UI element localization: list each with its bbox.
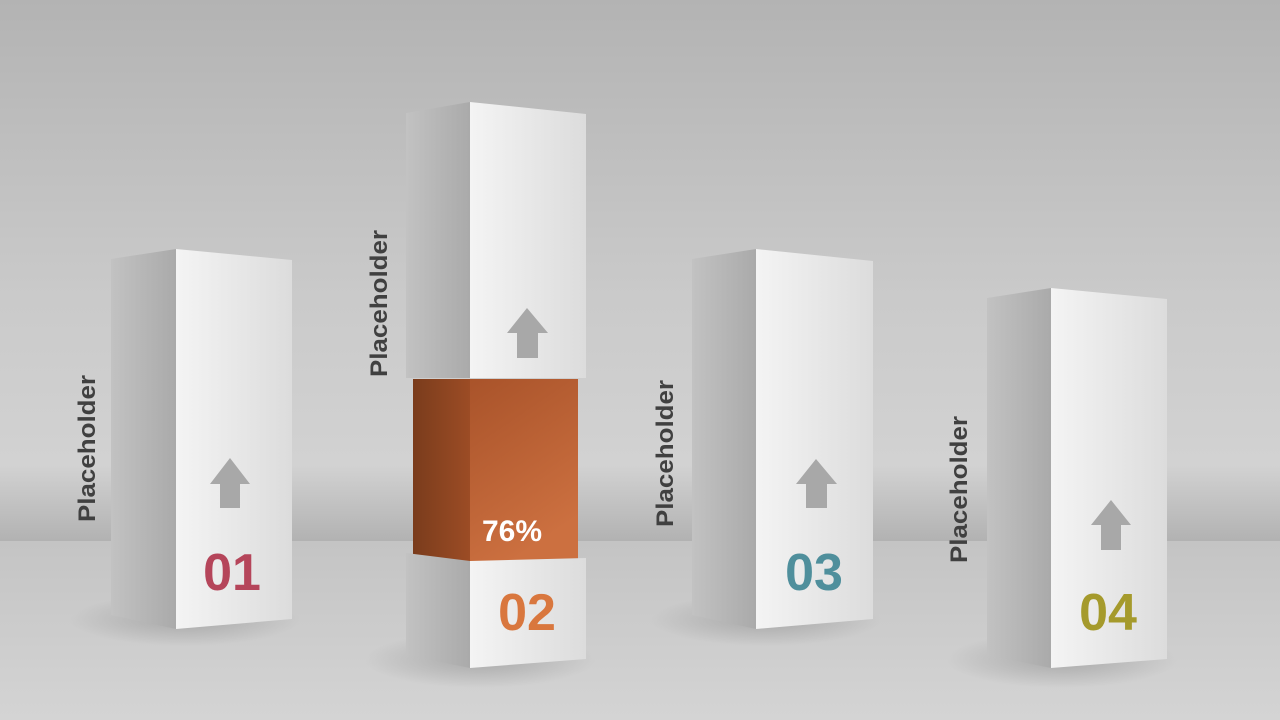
- box 03: [651, 249, 881, 646]
- number 01: 01: [203, 544, 261, 602]
- label: placeholder 02: Placeholder: [366, 230, 393, 377]
- box 04: [947, 288, 1177, 688]
- icon: arrow 04: [1091, 500, 1131, 550]
- orange fill block: [413, 379, 470, 562]
- box 02: [365, 102, 595, 688]
- label: placeholder 01: Placeholder: [74, 375, 101, 522]
- number 02: 02: [498, 584, 556, 642]
- label: placeholder 03: Placeholder: [652, 380, 679, 527]
- icon: arrow 01: [210, 458, 250, 508]
- number 03: 03: [785, 544, 843, 602]
- percentage: 76%: [482, 515, 542, 548]
- top block: [406, 102, 470, 378]
- number 04: 04: [1079, 584, 1137, 642]
- bottom block: [406, 553, 470, 668]
- icon: arrow 02: [507, 308, 548, 358]
- label: placeholder 04: Placeholder: [946, 416, 973, 563]
- icon: arrow 03: [796, 459, 837, 508]
- box 01: [70, 249, 300, 646]
